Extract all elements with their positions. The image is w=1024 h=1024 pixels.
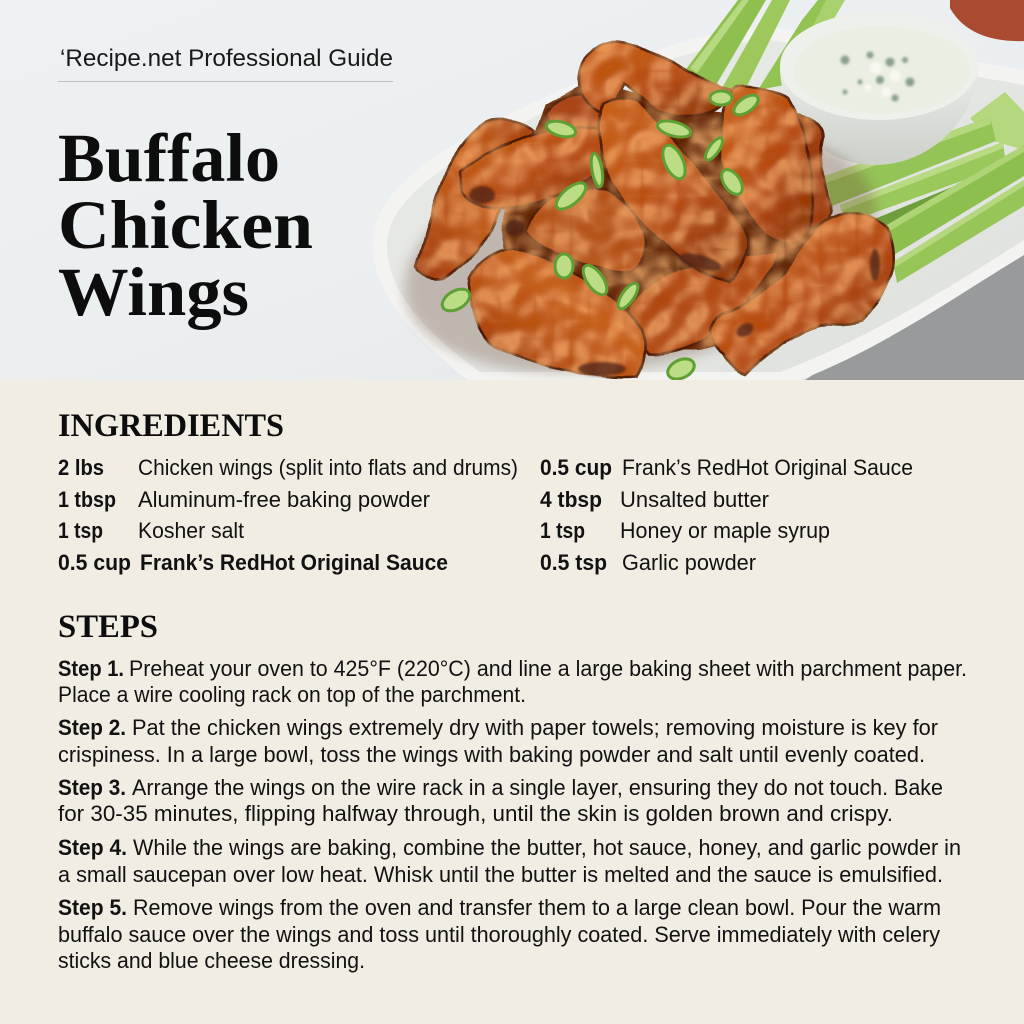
ingredients list: right column: 4 tbsp — [540, 487, 602, 512]
ingredients list: left column: 2 lbs — [58, 455, 104, 480]
step 3 — [58, 775, 943, 826]
celery sticks, right group — [825, 92, 1024, 283]
soft shadow under wings — [398, 141, 882, 380]
front flat wing — [469, 248, 645, 379]
step 5: buffalo sauce over the wings and toss until thoroughly coated. Serve immediately with celery — [58, 922, 940, 947]
step 1: Preheat your oven to 425°F (220°C) and line a large baking sheet with parchment paper. — [129, 656, 967, 681]
step 4 — [58, 835, 961, 887]
title: Buffalo — [58, 120, 280, 196]
step 5: Remove wings from the oven and transfer them to a large clean bowl. Pour the warm — [133, 895, 941, 920]
ingredients list: right column: Honey or maple syrup — [620, 518, 830, 543]
buffalo wings pile — [416, 42, 894, 379]
step 2 — [58, 715, 938, 767]
step 2: Step 2. — [58, 715, 126, 740]
white plate — [373, 26, 1024, 384]
step 1: Place a wire cooling rack on top of the parchment. — [58, 682, 526, 707]
step 4: a small saucepan over low heat. Whisk until the butter is melted and the sauce is emulsified. — [58, 862, 943, 887]
step 1: Step 1. — [58, 656, 124, 681]
left wing — [416, 119, 534, 278]
step 1 — [58, 656, 967, 707]
ingredients list: left column: 1 tsp — [58, 518, 103, 543]
grey cloth — [805, 255, 1024, 380]
guide label: ‘Recipe.net Professional Guide — [60, 45, 393, 72]
dark seared ends — [469, 186, 880, 376]
title — [58, 120, 313, 330]
hot sauce jar — [950, 0, 1024, 41]
ingredients list: right column: Frank’s RedHot Original Sauce — [622, 455, 913, 480]
ingredients list: right column: 0.5 cup — [540, 455, 612, 480]
small back lump — [544, 93, 600, 127]
step 4: Step 4. — [58, 835, 127, 860]
ingredients list: right column: 1 tsp — [540, 518, 585, 543]
right upright wing — [720, 87, 812, 244]
dark filler between wings — [500, 80, 830, 350]
ingredients list: right column: Unsalted butter — [620, 487, 769, 512]
ingredients list: left column: Aluminum-free baking powder — [138, 487, 430, 512]
lower mid wing — [628, 250, 778, 354]
celery sticks, top group — [684, 0, 845, 92]
central big flat — [600, 97, 748, 281]
drumstick — [710, 213, 894, 374]
ingredients list: left column: Frank’s RedHot Original Sauce — [140, 550, 448, 575]
ingredients list: left column — [58, 455, 518, 575]
marble background — [0, 0, 1024, 380]
green onion garnish — [439, 91, 761, 383]
step 2: crispiness. In a large bowl, toss the wings with baking powder and salt until evenly coated. — [58, 742, 925, 767]
ingredients list: left column: Kosher salt — [138, 518, 244, 543]
step 3: Arrange the wings on the wire rack in a single layer, ensuring they do not touch. Bake — [132, 775, 943, 800]
ingredients list: right column — [540, 455, 913, 575]
top wing — [578, 42, 734, 116]
step 5 — [58, 895, 941, 973]
step 2: Pat the chicken wings extremely dry with paper towels; removing moisture is key for — [132, 715, 938, 740]
step 4: While the wings are baking, combine the butter, hot sauce, honey, and garlic powder in — [133, 835, 961, 860]
ingredients list: left column: 0.5 cup — [58, 550, 131, 575]
back right wing — [797, 112, 833, 226]
ingredients list: left column: Chicken wings (split into flats and drums) — [138, 455, 518, 480]
heading: ingredients: INGREDIENTS — [58, 408, 284, 444]
ingredients list: right column: 0.5 tsp — [540, 550, 607, 575]
panel: hero food photo — [0, 0, 1024, 412]
step 3: for 30-35 minutes, flipping halfway through, until the skin is golden brown and crispy. — [58, 801, 893, 826]
heading: steps: STEPS — [58, 609, 158, 645]
dip bowl with blue cheese dressing — [780, 12, 978, 165]
step 5: Step 5. — [58, 895, 127, 920]
ingredients list: right column: Garlic powder — [622, 550, 756, 575]
step 3: Step 3. — [58, 775, 126, 800]
ingredients list: left column: 1 tbsp — [58, 487, 116, 512]
steps text block — [58, 656, 967, 973]
step 5: sticks and blue cheese dressing. — [58, 948, 365, 973]
title: Wings — [58, 254, 249, 330]
middle lump — [526, 189, 646, 272]
blue cheese crumbles — [840, 52, 914, 102]
title: Chicken — [58, 187, 313, 263]
left flat wing — [460, 127, 609, 209]
